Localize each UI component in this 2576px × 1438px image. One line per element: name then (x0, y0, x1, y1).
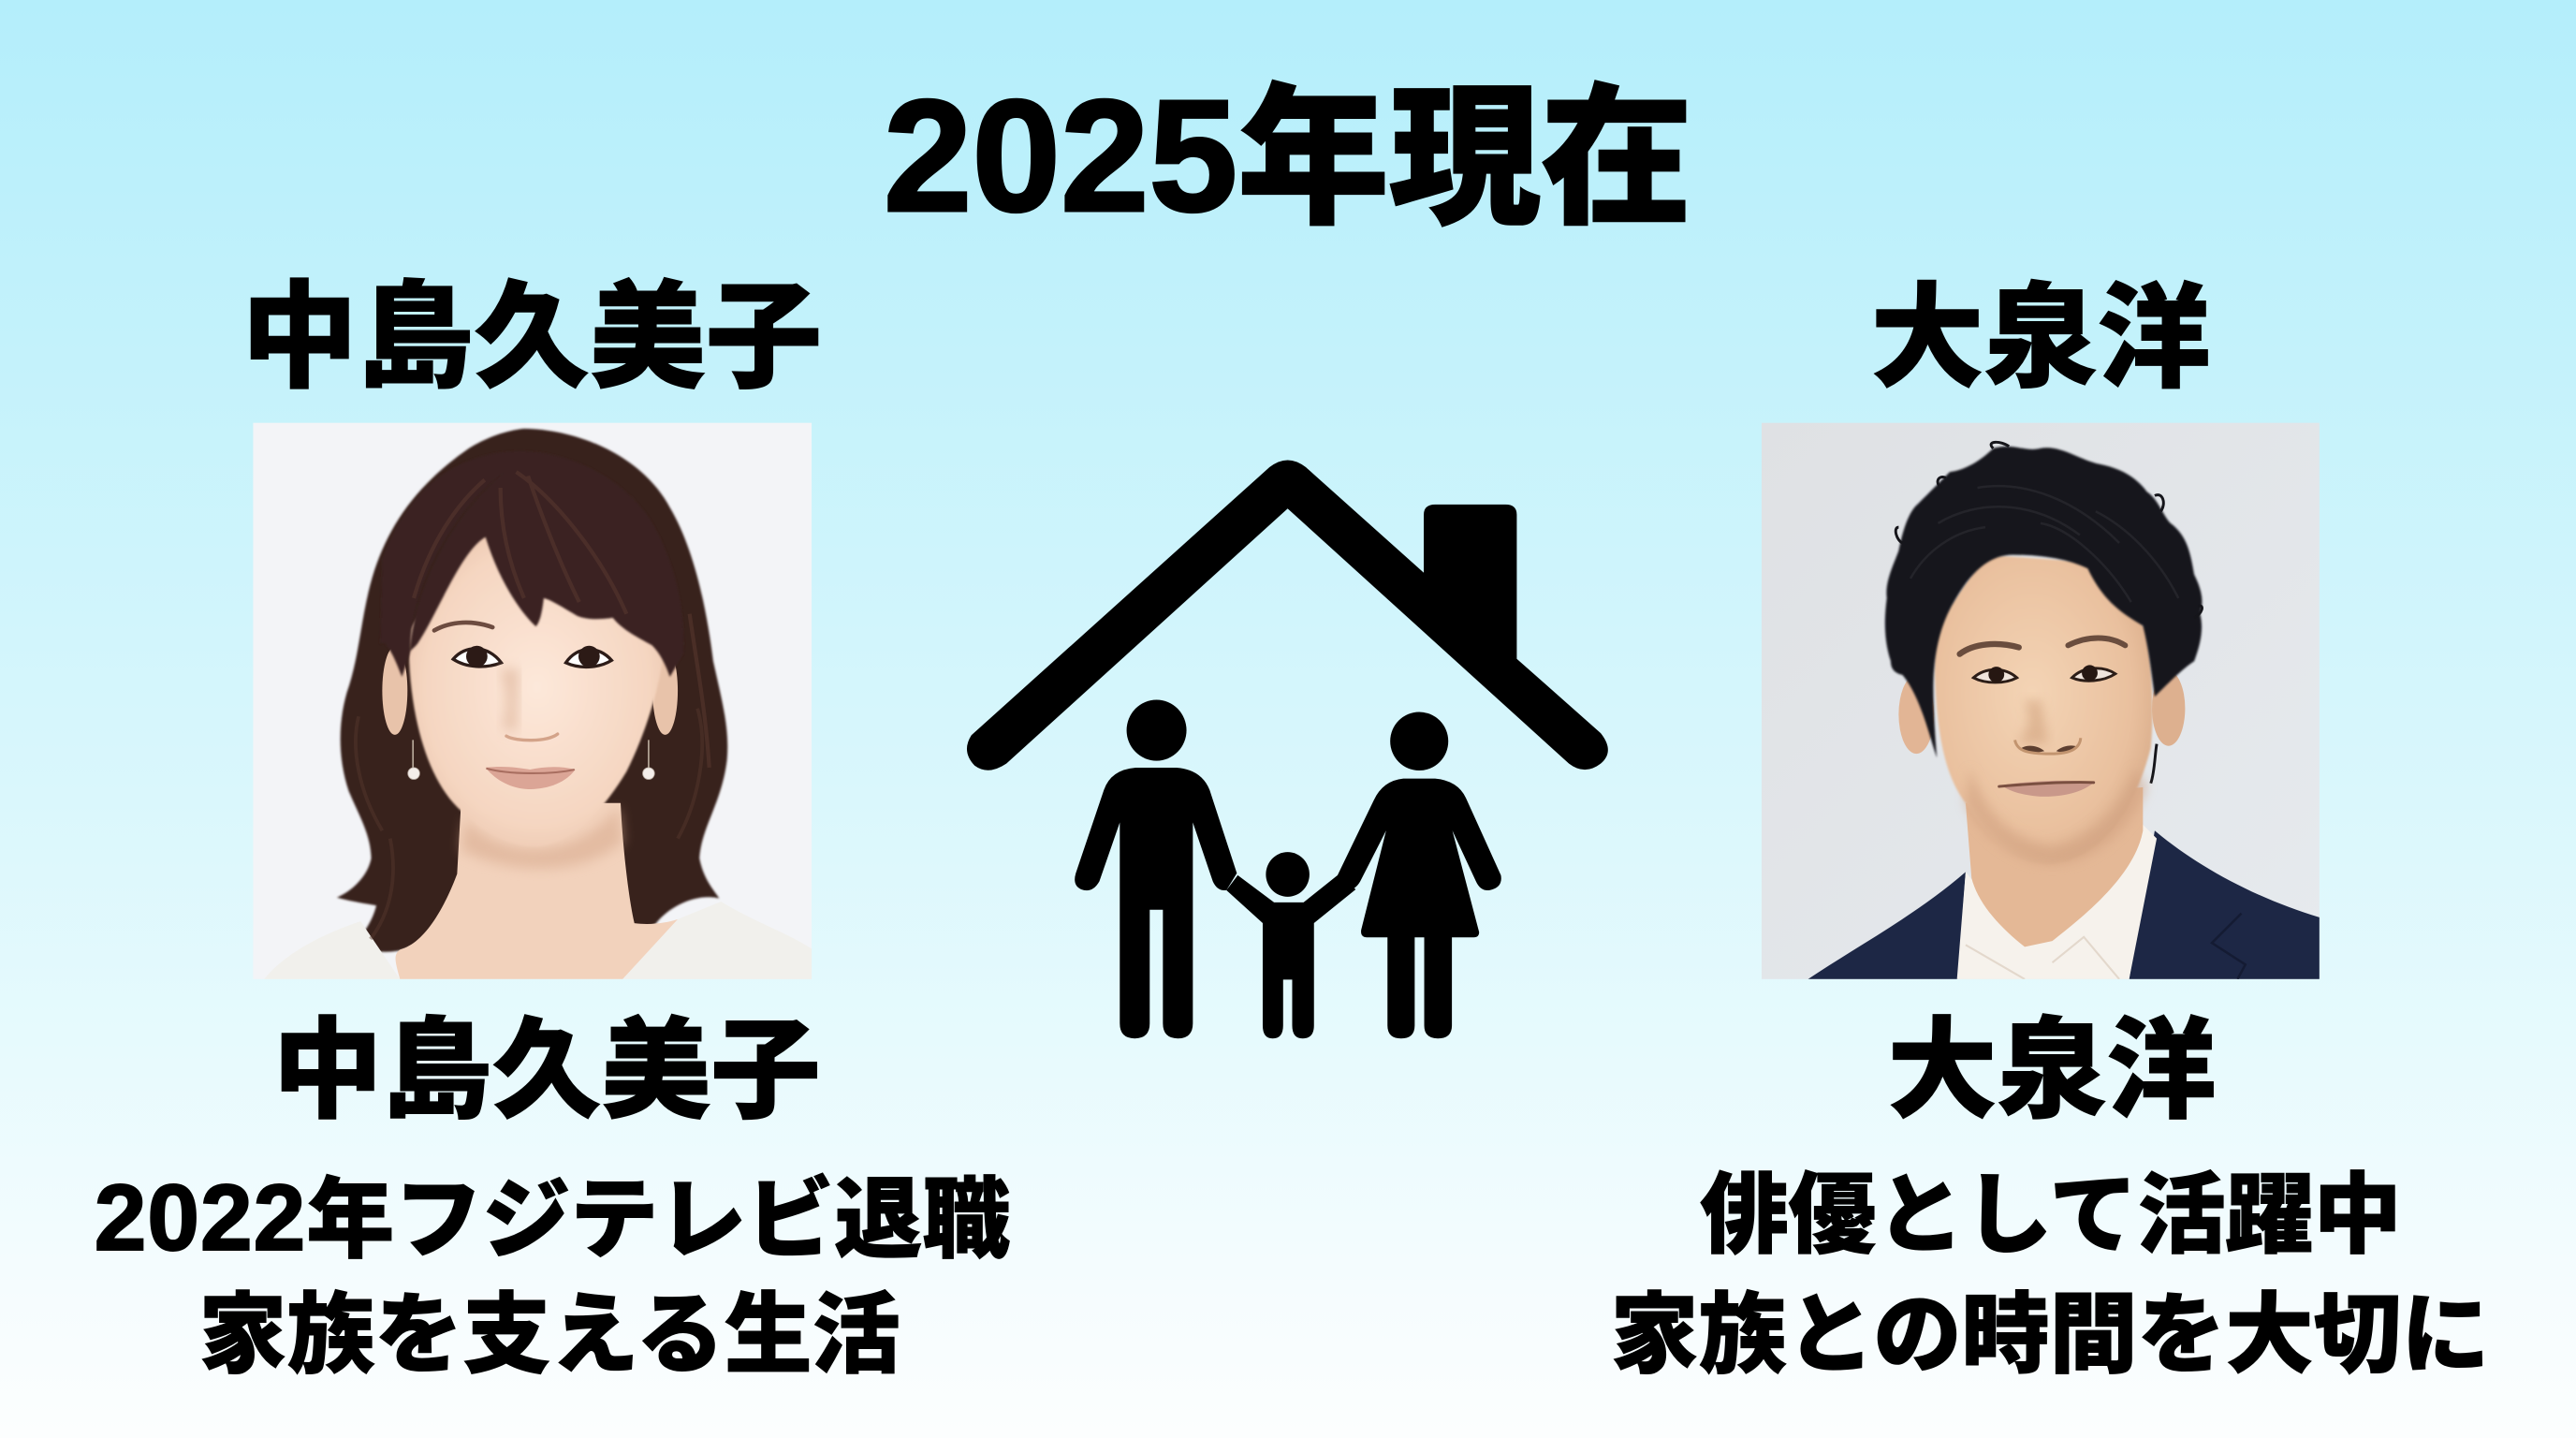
nose (506, 734, 558, 741)
ears (1898, 675, 1934, 754)
neck and chest (396, 803, 678, 979)
lips (486, 767, 576, 789)
eyes (1973, 669, 2017, 682)
face (1934, 556, 2153, 831)
nose (2017, 700, 2048, 744)
text: Nakajima line 1: 2022年フジテレビ退職 (95, 1166, 1010, 1270)
text: Oizumi line 2: 家族との時間を大切に (1610, 1285, 2490, 1384)
text: Nakajima line 2: 家族を支える生活 (198, 1285, 900, 1384)
ears (382, 647, 407, 735)
photo: man portrait (1762, 423, 2320, 979)
sweater (264, 921, 400, 979)
panel: Oizumi Yo (1610, 274, 2490, 1384)
neck (1966, 787, 2143, 946)
face (408, 536, 663, 813)
heading: Oizumi name top: 大泉洋 (1870, 274, 2211, 402)
mother (1338, 712, 1501, 1038)
shirt (1957, 825, 2157, 979)
heading: Nakajima name bottom: 中島久美子 (272, 1009, 820, 1132)
title: 2025年現在 (884, 67, 1692, 245)
mouth (2001, 781, 2094, 797)
father (1075, 700, 1237, 1038)
earrings (413, 740, 649, 770)
roof and chimney (967, 460, 1608, 770)
jacket (1808, 872, 1966, 979)
eyes (453, 649, 501, 667)
back hair (337, 429, 727, 952)
brows (1960, 644, 2019, 654)
text: Oizumi line 1: 俳優として活躍中 (1700, 1166, 2402, 1264)
bangs (389, 497, 676, 678)
heading: Oizumi name bottom: 大泉洋 (1887, 1009, 2217, 1132)
panel: Nakajima Kumiko (95, 273, 1010, 1384)
heading: Nakajima name top: 中島久美子 (242, 273, 822, 403)
child (1226, 852, 1355, 1038)
hair (1885, 447, 2202, 757)
brows (434, 623, 492, 630)
icon: family under house roof (966, 461, 1608, 1039)
photo: woman portrait (253, 423, 812, 979)
